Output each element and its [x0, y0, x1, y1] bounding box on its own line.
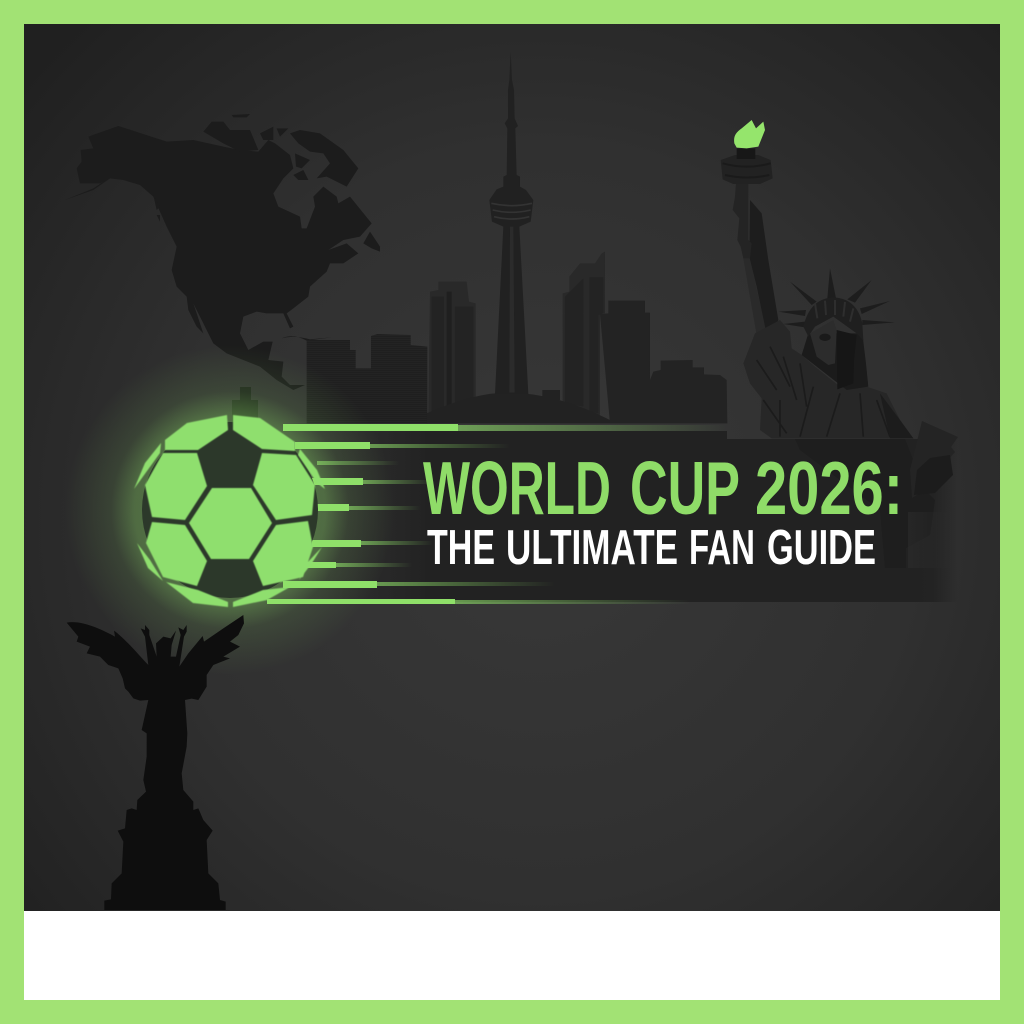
robe	[743, 320, 913, 438]
torch flame	[734, 120, 765, 148]
title line one: WORLD	[423, 446, 611, 530]
faded speed trails	[228, 425, 728, 604]
cn tower	[489, 52, 533, 394]
title line two: THE	[427, 520, 495, 575]
head and crown	[802, 297, 868, 390]
title line two: GUIDE	[767, 520, 876, 575]
ball dark base	[142, 422, 318, 598]
north america map silhouette	[65, 114, 380, 390]
title band	[290, 431, 957, 602]
small tower behind ball	[232, 387, 258, 432]
building group right	[600, 301, 727, 423]
stadium dome	[427, 390, 610, 423]
title line one: 2026:	[755, 446, 903, 530]
building group left	[307, 334, 427, 423]
title line two: FAN	[689, 520, 755, 575]
statue of liberty	[721, 120, 913, 438]
soccer ball	[134, 415, 325, 607]
title text	[423, 446, 903, 575]
toronto skyline silhouette	[307, 52, 727, 423]
raised arm and torch	[721, 148, 778, 343]
mexico city angel of independence monument	[67, 615, 244, 910]
speed lines	[228, 424, 728, 604]
building centre left	[428, 282, 476, 415]
soft panel on right of band	[908, 512, 954, 568]
crown rays	[778, 268, 895, 327]
statue lower robe seen through band	[795, 439, 935, 568]
ball panels	[134, 415, 325, 607]
title line two: ULTIMATE	[506, 520, 678, 575]
building centre right	[563, 252, 605, 415]
title line one: CUP	[630, 446, 739, 530]
solid speed bars	[267, 424, 458, 604]
soccer ball glow	[65, 345, 395, 675]
white footer panel	[24, 911, 1000, 1000]
statue tablet and hand	[910, 421, 958, 498]
